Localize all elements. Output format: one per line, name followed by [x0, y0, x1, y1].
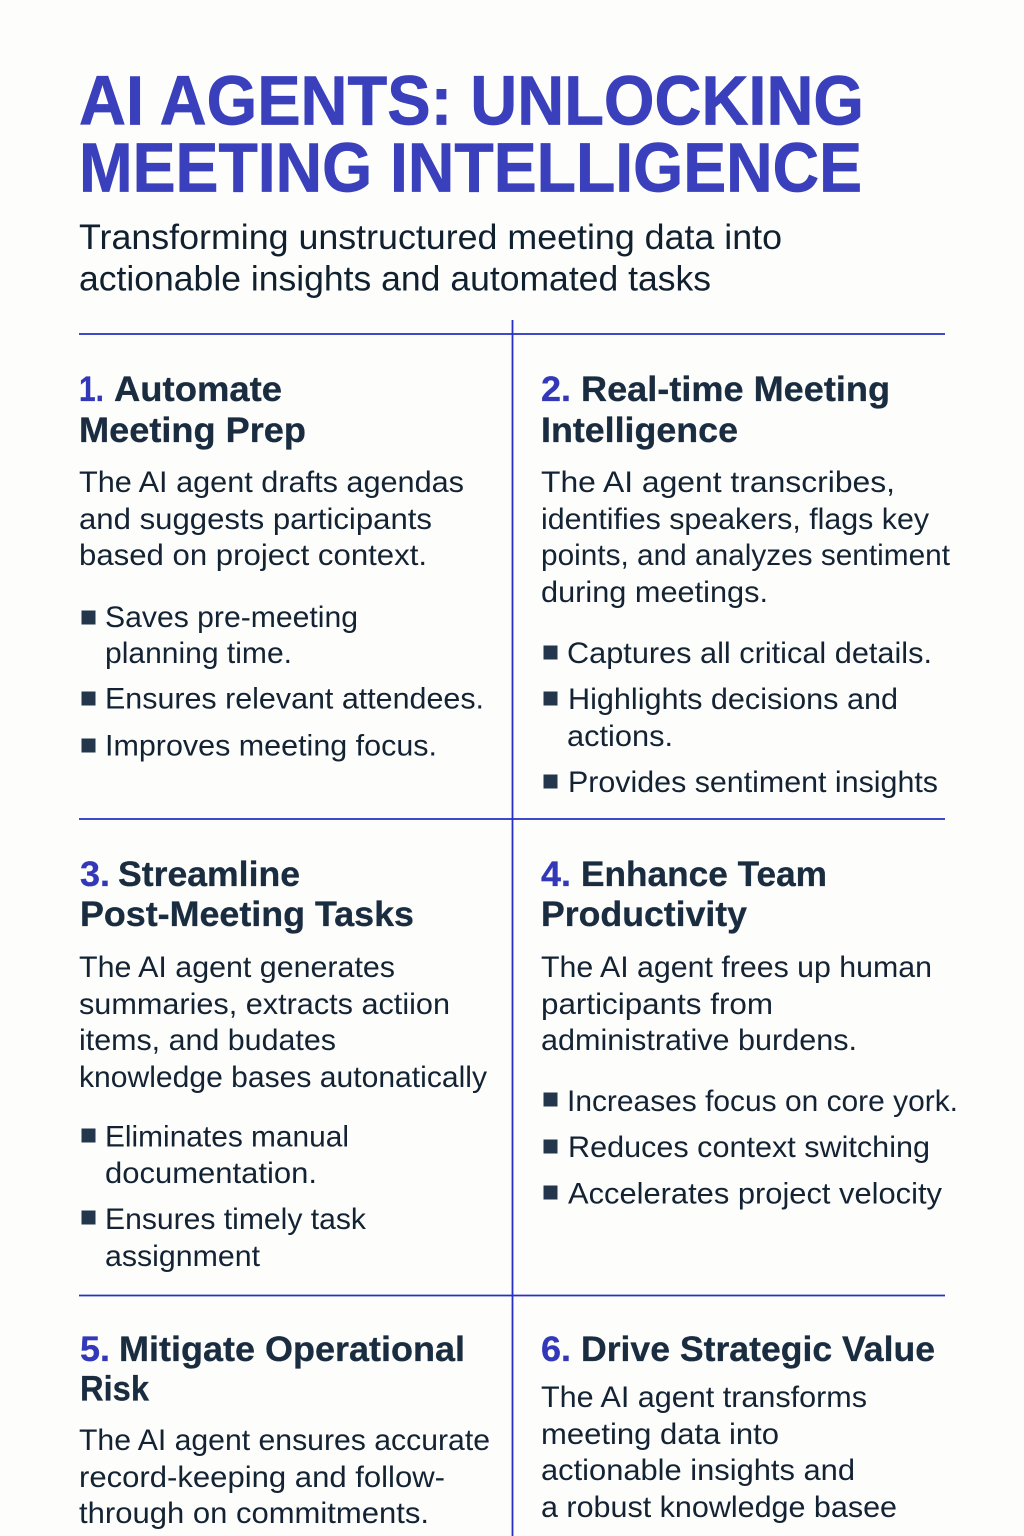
list: section 3 benefits: assignment [105, 1240, 261, 1273]
heading: section 1: Meeting Prep [79, 411, 306, 450]
text: section 2 description: points, and analyzes sentiment [541, 539, 951, 572]
subtitle: Transforming unstructured meeting data into [79, 218, 782, 257]
title: MEETING INTELLIGENCE [79, 128, 862, 206]
heading: section 3: Post-Meeting Tasks [80, 895, 414, 934]
text: section 5 description: record-keeping and follow- [79, 1461, 445, 1494]
text: section 1 description: The AI agent drafts agendas [79, 466, 464, 499]
text: section 3 description: items, and budates [79, 1024, 336, 1057]
text: section 6 description: The AI agent transforms [541, 1381, 867, 1414]
text: section 5 description: The AI agent ensures accurate [79, 1424, 490, 1457]
list: section 3 benefits: Ensures timely task [105, 1203, 367, 1236]
title [79, 62, 864, 206]
panel: 4 enhance team productivity [541, 855, 958, 1210]
text: section 6 description: a robust knowledge basee [541, 1491, 897, 1524]
text: section 1 description: and suggests participants [79, 503, 432, 536]
panel: 6 drive strategic value [541, 1330, 935, 1524]
panel: 2 real-time meeting intelligence [541, 370, 951, 799]
text: section 4 description: participants from [541, 988, 773, 1021]
text: section 5 description: through on commitments. [79, 1497, 429, 1530]
list: section 2 benefits: actions. [567, 720, 673, 753]
heading: section 5 [80, 1330, 465, 1408]
text: section 6 description: actionable insights and [541, 1454, 855, 1487]
list: section 1 benefits: planning time. [105, 637, 292, 670]
title: AI AGENTS: UNLOCKING [79, 62, 864, 140]
list: section 4 benefits [544, 1085, 958, 1210]
text: section 1 description: based on project context. [79, 539, 427, 572]
heading: section 4: 4. [541, 855, 571, 894]
text: section 6 description: meeting data into [541, 1418, 779, 1451]
list: section 3 benefits [82, 1120, 367, 1273]
text: section 3 description: The AI agent generates [79, 951, 395, 984]
text: section 1 description [79, 466, 464, 572]
text: section 3 description: summaries, extracts actiion [79, 988, 450, 1021]
list: section 2 benefits: Highlights decisions and [568, 683, 898, 716]
list: section 1 benefits: Improves meeting focus. [105, 730, 437, 762]
heading: section 6: Drive Strategic Value [581, 1330, 935, 1369]
heading: section 2: Intelligence [541, 411, 738, 450]
heading: section 1: Automate [114, 370, 282, 409]
heading: section 5: Risk [80, 1370, 149, 1408]
subtitle [79, 218, 782, 298]
text: section 2 description: identifies speakers, flags key [541, 503, 929, 536]
text: section 4 description: administrative burdens. [541, 1024, 857, 1057]
list: section 3 benefits: documentation. [105, 1157, 317, 1190]
heading: section 4 [541, 855, 827, 934]
heading: section 3: Streamline [118, 855, 300, 894]
panel: 1 automate meeting prep [79, 370, 484, 762]
panel: 3 streamline post-meeting tasks [79, 855, 487, 1273]
heading: section 4: Productivity [541, 895, 748, 934]
heading: section 2 [541, 370, 890, 450]
text: section 2 description: The AI agent transcribes, [541, 466, 895, 499]
list: section 1 benefits: Saves pre-meeting [105, 601, 358, 634]
heading: section 4: Enhance Team [581, 855, 827, 894]
heading: section 6: 6. [541, 1330, 571, 1369]
heading: section 5: 5. [80, 1330, 110, 1369]
list: section 3 benefits: Eliminates manual [105, 1120, 349, 1154]
text: section 3 description: knowledge bases autonatically [79, 1061, 487, 1094]
heading: section 2: 2. [541, 370, 571, 409]
heading: section 1: 1. [79, 370, 104, 409]
text: section 2 description: during meetings. [541, 576, 768, 609]
heading: section 5: Mitigate Operational [119, 1330, 465, 1369]
text: section 4 description: The AI agent frees up human [541, 951, 932, 984]
list: section 2 benefits [544, 637, 938, 799]
heading: section 1 [79, 370, 306, 450]
text: section 6 description [541, 1381, 897, 1524]
list: section 2 benefits: Provides sentiment insights [568, 766, 938, 799]
text: section 3 description [79, 951, 487, 1094]
text: section 5 description [79, 1424, 490, 1530]
list: section 4 benefits: Accelerates project velocity [568, 1178, 942, 1210]
subtitle: actionable insights and automated tasks [79, 260, 711, 298]
list: section 2 benefits: Captures all critical details. [567, 637, 932, 670]
list: section 1 benefits: Ensures relevant attendees. [105, 682, 484, 716]
heading: section 3 [80, 855, 414, 934]
text: section 2 description [541, 466, 951, 609]
text: section 4 description [541, 951, 932, 1057]
list: section 4 benefits: Increases focus on core york. [567, 1085, 958, 1118]
list: section 1 benefits [82, 601, 484, 762]
list: section 4 benefits: Reduces context switching [568, 1131, 930, 1164]
heading: section 2: Real-time Meeting [581, 370, 890, 409]
heading: section 3: 3. [80, 855, 110, 894]
panel: 5 mitigate operational risk [79, 1330, 490, 1530]
